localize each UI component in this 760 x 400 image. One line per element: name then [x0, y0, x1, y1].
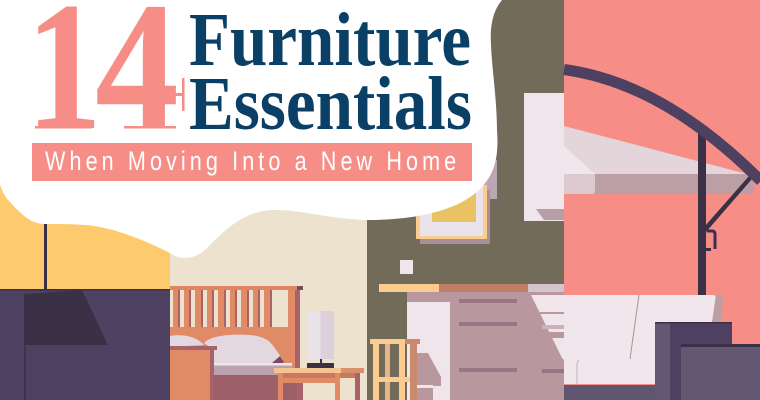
framed picture: [416, 185, 490, 244]
panel: kitchen: [370, 93, 564, 400]
window: [524, 93, 564, 221]
stool: [370, 339, 441, 400]
umbrella pole: [698, 132, 752, 296]
side table: [274, 368, 364, 400]
panel: white title blob: [0, 0, 502, 258]
subtitle banner: When Moving Into a New Home: [45, 147, 456, 177]
title number 14: [26, 0, 184, 168]
panel: living room sofa: [0, 222, 170, 400]
counter top: [379, 284, 564, 292]
curtain: [480, 160, 497, 199]
footboard: [170, 346, 217, 400]
panel: bed: [170, 286, 303, 400]
bed mattress: [213, 363, 298, 400]
umbrella arm: [564, 70, 760, 181]
patio sofa cushions: [564, 295, 723, 384]
panel: patio umbrella: [564, 70, 760, 400]
light switch: [400, 260, 413, 274]
small pillow: [170, 335, 204, 347]
wicker base: [564, 322, 760, 400]
pillow: [204, 335, 283, 363]
umbrella canopy: [564, 126, 754, 194]
icon: table lamp: [307, 311, 334, 368]
title: Essentials: Essentials: [189, 62, 472, 146]
title: Furniture: Furniture: [189, 0, 471, 82]
cabinets: [407, 292, 564, 400]
